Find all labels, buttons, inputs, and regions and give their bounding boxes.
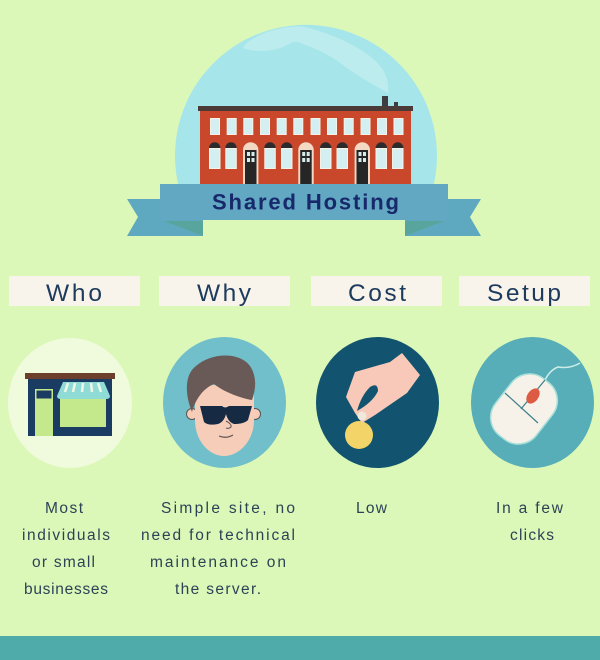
text: Setup column: clicks [510,527,554,544]
column heading: Who [9,276,140,307]
text: Cost column: Low [356,500,388,517]
icon: hand with coin [316,337,439,468]
column heading: Setup [459,276,590,307]
icon: storefront [8,338,132,468]
ribbon centre [160,184,448,220]
text: Why column: the server. [175,581,261,598]
footer bar [0,636,600,660]
sky circle [175,25,437,195]
column heading: Why: Why [197,280,252,307]
icon: computer mouse [471,337,594,468]
smoke [243,24,388,93]
column heading: Setup: Setup [487,280,561,307]
column heading: Cost: Cost [348,280,406,307]
ribbon title: Shared Hosting [212,190,399,214]
text: Who column [22,500,110,598]
ribbon banner [127,184,481,236]
icon: man with sunglasses [163,337,286,468]
chimneys [382,96,398,106]
text: Who column: or small [32,554,95,571]
text: Who column: individuals [22,527,110,544]
column heading: Cost [311,276,442,307]
column heading: Who: Who [46,280,102,307]
text: Setup column [496,500,564,544]
text: Why column: Simple site, no [161,500,295,517]
text: Why column: maintenance on [150,554,286,571]
upper windows [210,118,403,134]
lower window arches [209,142,403,148]
roof [198,106,413,111]
text: Who column: businesses [24,581,108,598]
hero illustration: building in sky circle [175,24,437,195]
doors [243,142,370,184]
text: Why column [141,500,295,598]
text: Setup column: In a few [496,500,564,517]
text: Why column: need for technical [141,527,295,544]
column heading: Why [159,276,290,307]
building body [200,110,411,185]
ribbon folds [164,221,444,236]
lower windows [210,148,403,168]
ribbon tails [127,199,481,236]
text: Who column: Most [45,500,84,517]
